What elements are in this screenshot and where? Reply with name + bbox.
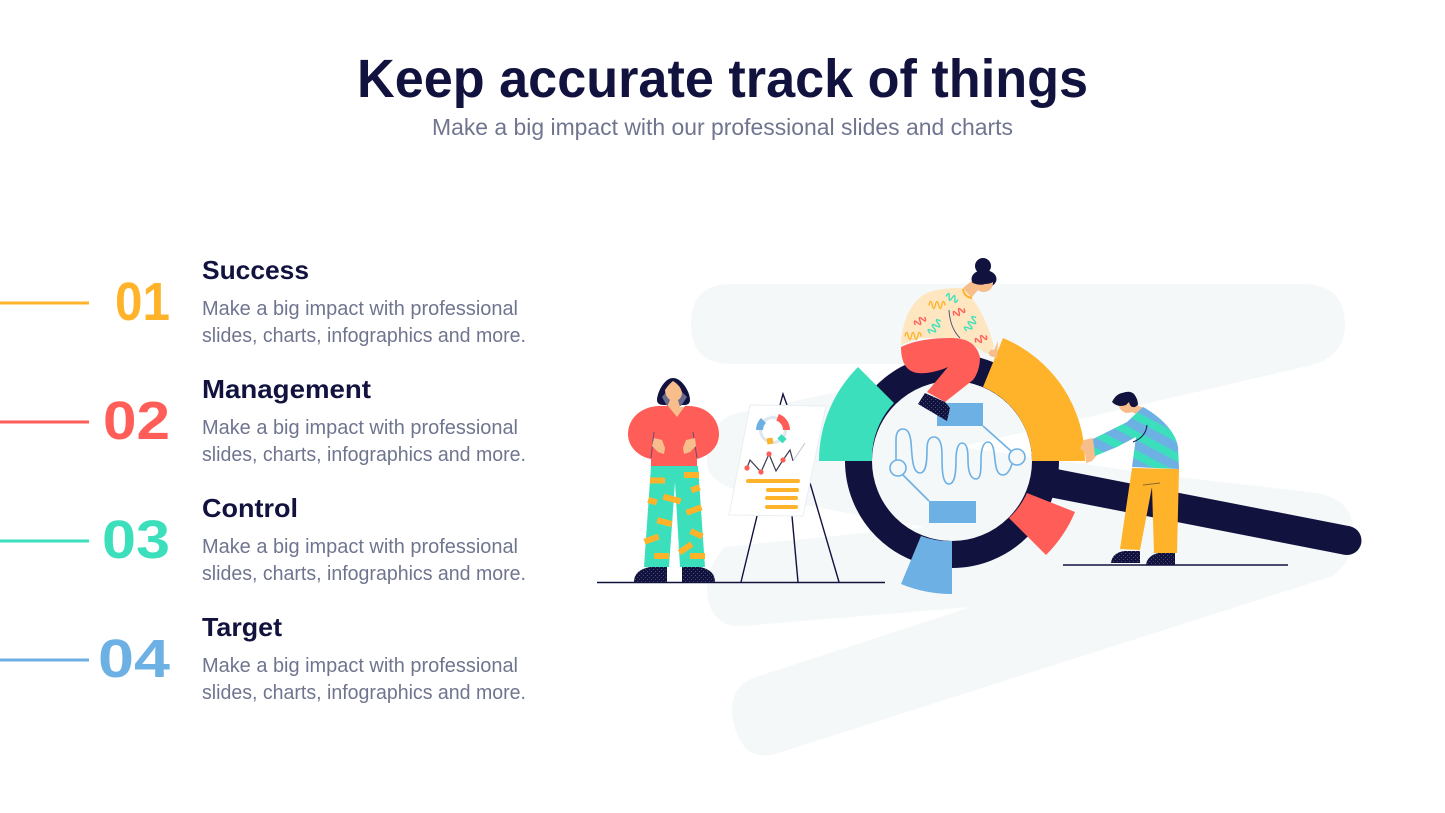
heading: Control: Control (202, 493, 298, 523)
connector line 02 (0, 420, 89, 424)
sweater squiggles (905, 293, 988, 345)
hair (657, 378, 690, 405)
handle (1045, 482, 1347, 540)
connector line 03 (0, 540, 89, 542)
board line chart (744, 443, 805, 475)
description 01: slides, charts, infographics and more. (202, 325, 526, 347)
description 02 (202, 417, 526, 466)
person: woman standing (628, 378, 719, 582)
sector: yellow (983, 338, 1085, 461)
person: man pushing (1080, 392, 1179, 565)
description 01: Make a big impact with professional (202, 298, 518, 320)
subtitle: Make a big impact with our professional slides and charts (432, 114, 1013, 140)
list item 01: Success (0, 255, 526, 347)
trousers (901, 338, 980, 402)
connector line 01 (0, 302, 89, 304)
hand (985, 341, 998, 358)
description 03 (202, 536, 526, 585)
face and neck (665, 381, 686, 417)
description 04: Make a big impact with professional (202, 655, 518, 677)
description 01 (202, 298, 526, 347)
ground lines (597, 565, 1288, 582)
description 04 (202, 655, 526, 704)
person: woman sitting (901, 258, 998, 421)
number 01: 01 (115, 272, 170, 332)
sweater (901, 288, 994, 354)
description 02: slides, charts, infographics and more. (202, 444, 526, 466)
ring (858, 368, 1046, 554)
board text bars (746, 479, 800, 509)
sector: blue (901, 536, 952, 594)
list item 02: Management (0, 374, 526, 466)
shoes (634, 567, 715, 582)
lens diagram (890, 403, 1025, 523)
magnifying glass (819, 338, 1362, 594)
sector: red (1009, 493, 1075, 555)
face (973, 282, 993, 292)
shoe (918, 393, 950, 421)
board donut chart (760, 417, 786, 444)
hands (1080, 438, 1097, 463)
trouser pattern (643, 472, 705, 559)
sleeve fold (1133, 425, 1147, 442)
heading: Management: Management (202, 374, 371, 404)
number 02: 02 (103, 391, 170, 451)
number 04: 04 (98, 629, 170, 689)
list item 04: Target (0, 612, 526, 704)
sector: teal (819, 367, 894, 461)
sleeve fold (949, 310, 960, 338)
list item 03: Control (0, 493, 526, 585)
hair (1112, 392, 1138, 407)
neck and face (1128, 404, 1145, 415)
easel legs (741, 394, 839, 582)
hair bun (975, 258, 991, 274)
trousers (644, 466, 705, 567)
description 02: Make a big impact with professional (202, 417, 518, 439)
neck (963, 280, 978, 298)
description 03: Make a big impact with professional (202, 536, 518, 558)
connector line 04 (0, 658, 89, 662)
background scribble shape (691, 284, 1353, 755)
heading: Target: Target (202, 612, 282, 642)
title: Keep accurate track of things (357, 49, 1088, 109)
description 03: slides, charts, infographics and more. (202, 563, 526, 585)
board (729, 405, 826, 516)
sweater (628, 406, 719, 466)
trousers (1120, 468, 1179, 553)
number 03: 03 (102, 510, 170, 570)
collar (963, 289, 972, 298)
striped sweater (1093, 407, 1179, 469)
heading: Success: Success (202, 255, 309, 285)
hands (652, 438, 665, 454)
description 04: slides, charts, infographics and more. (202, 682, 526, 704)
shoes (1111, 551, 1175, 565)
easel with chart board (729, 394, 839, 582)
